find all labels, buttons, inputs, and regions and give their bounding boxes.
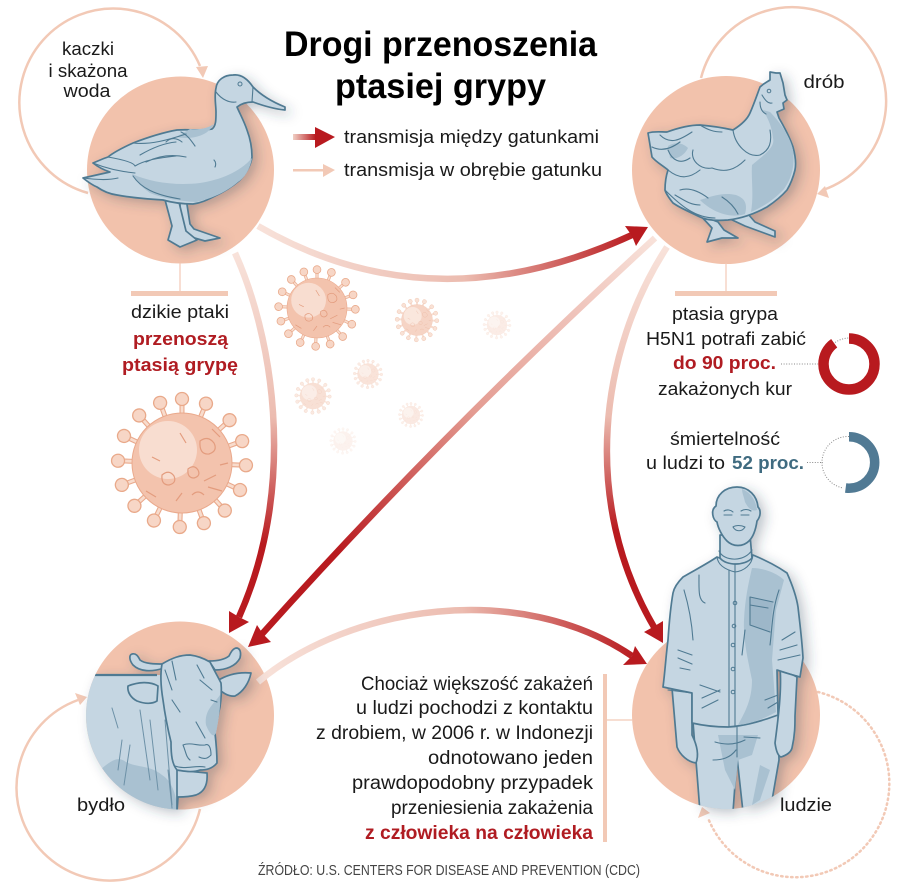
title: Drogi przenoszenia — [284, 25, 598, 64]
text: human-to-human paragraph: przeniesienia zakażenia — [391, 798, 593, 819]
circle: poultry — [632, 76, 820, 264]
legend: intraspecies arrow — [293, 164, 335, 177]
source: ŹRÓDŁO: U.S. CENTERS FOR DISEASE AND PREVENTION (CDC) — [258, 862, 640, 879]
arrow: poultry to cattle — [248, 238, 655, 647]
text: human mortality: 52 proc. — [732, 452, 804, 473]
legend — [293, 126, 602, 180]
circle: duck — [87, 76, 274, 264]
duck legs and feet — [164, 196, 220, 247]
arrow: duck to poultry — [258, 226, 648, 279]
title: ptasiej grypy — [335, 67, 547, 106]
text: H5N1 poultry mortality: ptasia grypa — [672, 303, 779, 324]
text: H5N1 poultry mortality: zakażonych kur — [658, 378, 792, 399]
duck shading and feathers — [83, 82, 253, 202]
illustration: human — [663, 487, 803, 812]
icon: virus cluster — [275, 266, 511, 454]
label: poultry: drób — [804, 71, 844, 92]
loop arrow: poultry — [701, 7, 886, 198]
arrow: duck to cattle — [229, 253, 274, 633]
cow head — [161, 655, 221, 772]
shirt shading and details — [668, 564, 800, 727]
title — [284, 25, 598, 106]
arrow: cattle to humans — [258, 610, 647, 682]
text: H5N1 poultry mortality: do 90 proc. — [673, 352, 776, 373]
text: human-to-human paragraph: z człowieka na człowieka — [365, 823, 593, 844]
text: wild birds: dzikie ptaki — [131, 301, 229, 322]
text: human mortality: śmiertelność — [670, 428, 780, 449]
donut chart: 52 percent humans — [807, 436, 875, 488]
text: human-to-human paragraph: Chociaż większość zakażeń — [361, 674, 593, 695]
text: H5N1 poultry mortality — [646, 303, 806, 399]
text: wild birds — [122, 301, 238, 375]
text: wild birds: przenoszą — [133, 328, 229, 349]
cow ears — [128, 673, 251, 703]
illustration: chicken — [648, 72, 796, 242]
text: human-to-human paragraph: z drobiem, w 2006 r. w Indonezji — [316, 723, 593, 744]
loop arrow: ducks — [19, 8, 208, 193]
connector: duck label — [131, 263, 228, 296]
label: humans: ludzie — [780, 794, 832, 815]
legend: intraspecies label: transmisja w obrębie gatunku — [344, 159, 602, 180]
label: cattle: bydło — [77, 794, 125, 815]
illustration: cow — [70, 648, 251, 812]
text: H5N1 poultry mortality: H5N1 potrafi zabić — [646, 328, 806, 349]
human shirt — [663, 555, 803, 727]
cow horns — [130, 648, 241, 671]
arrow: poultry to humans — [607, 247, 667, 643]
icon: large virus — [111, 392, 253, 534]
loop arrow: humans (dotted) — [698, 692, 889, 877]
text: human mortality — [646, 428, 804, 473]
label: ducks: i skażona — [48, 60, 128, 81]
loop arrow: cattle — [17, 693, 200, 880]
human forearms — [672, 668, 797, 763]
text: human mortality: u ludzi to — [646, 452, 725, 473]
cow face details — [165, 661, 220, 768]
text: wild birds: ptasią grypę — [122, 354, 238, 375]
connector: paragraph to humans — [603, 674, 633, 842]
chicken body — [648, 72, 796, 220]
legend: interspecies label: transmisja między gatunkami — [344, 126, 599, 147]
legend: interspecies arrow — [293, 127, 335, 148]
circle: cattle — [86, 622, 274, 810]
circle: humans — [632, 621, 820, 809]
duck body — [83, 75, 285, 204]
label: ducks — [48, 38, 128, 101]
label: ducks: kaczki — [62, 38, 114, 59]
donut chart: 90 percent poultry — [781, 338, 874, 390]
text: human-to-human paragraph: odnotowano jeden — [428, 748, 593, 769]
text: human-to-human paragraph — [316, 674, 594, 844]
chicken legs — [700, 214, 775, 242]
text: human-to-human paragraph: prawdopodobny przypadek — [352, 773, 594, 794]
label: ducks: woda — [62, 80, 111, 101]
human neck and head — [713, 487, 760, 572]
text: human-to-human paragraph: u ludzi pochodzi z kontaktu — [356, 698, 593, 719]
illustration: duck — [83, 75, 285, 247]
chicken shading and feathers — [652, 89, 794, 218]
connector: poultry label — [675, 263, 777, 296]
